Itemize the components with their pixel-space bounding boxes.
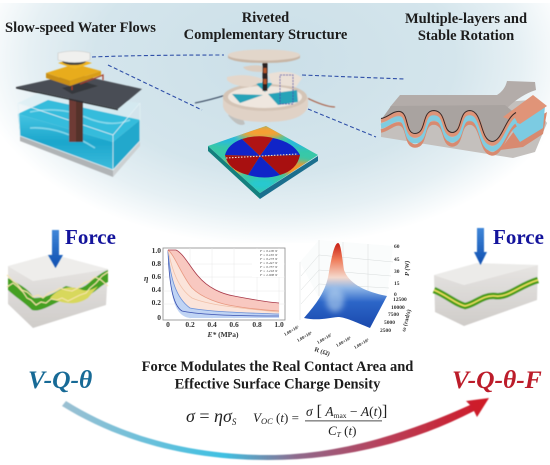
chart: 3D power surface: R (Ω) <box>313 346 331 358</box>
illustration: multilayer wave structure <box>381 81 547 158</box>
chart: 3D power surface: P (W) <box>404 261 411 276</box>
omega axis labels: 2500 <box>380 328 391 334</box>
y axis labels: 0.4 <box>152 285 161 294</box>
z axis labels: 15 <box>394 281 400 287</box>
z axis labels: 45 <box>394 257 400 263</box>
resistance axis labels: 1.00×10⁵ <box>283 324 300 337</box>
resistance axis labels: 1.00×10⁹ <box>353 337 370 350</box>
x axis labels: 0.4 <box>207 320 217 329</box>
chart: 3D power surface: ω (rad/s) <box>400 309 413 333</box>
equation: open-circuit voltage: V <box>253 410 261 425</box>
x axis labels: 0.6 <box>229 320 239 329</box>
heading: slow-speed water flows: Slow-speed Water Flows <box>5 20 156 36</box>
z axis labels <box>394 244 400 298</box>
x axis labels: 0.8 <box>252 320 262 329</box>
equation: open-circuit voltage: max <box>334 411 347 420</box>
equation: open-circuit voltage: OC <box>261 416 273 426</box>
resistance axis labels: 1.00×10⁶ <box>296 330 313 343</box>
omega axis labels: 5000 <box>384 320 395 326</box>
illustration: rough contact block <box>7 254 108 328</box>
resistance axis labels <box>283 324 370 350</box>
omega axis labels: 7500 <box>388 312 399 318</box>
illustration: riveted rotor exploded view <box>195 50 335 125</box>
label: V-Q-theta-F: V-Q-θ-F <box>452 365 542 394</box>
z axis labels: 0 <box>394 292 397 298</box>
heading: multiple layers and stable rotation: Multiple-layers and <box>405 11 527 27</box>
y axis labels: 0.2 <box>152 298 161 307</box>
heading: riveted complementary structure: Riveted <box>242 10 289 26</box>
equation: open-circuit voltage: ( <box>273 410 280 425</box>
y axis labels <box>152 246 161 322</box>
arrow: V-Q-theta to V-Q-theta-F <box>62 398 489 460</box>
illustration: water tank test rig <box>16 51 142 177</box>
label: V-Q-theta: V-Q-θ <box>28 365 92 394</box>
equation: open-circuit voltage: σ [ A <box>306 403 334 420</box>
illustration: smooth contact block <box>434 263 538 326</box>
label: force left: Force <box>65 225 116 249</box>
equation: open-circuit voltage: C <box>328 423 337 438</box>
icon: force arrow right <box>474 228 487 265</box>
equation: open-circuit voltage: T <box>337 430 342 439</box>
y axis labels: 0 <box>157 313 161 322</box>
omega axis labels: 10000 <box>391 305 405 311</box>
equation: sigma: S <box>232 417 237 427</box>
z axis labels: 60 <box>394 244 400 250</box>
equation: open-circuit voltage: − <box>347 404 361 419</box>
chart legend: F = 0.100 N <box>259 249 278 253</box>
x axis labels: 0.2 <box>185 320 195 329</box>
x axis labels <box>166 320 284 329</box>
equation: open-circuit voltage: A(t)] <box>361 403 387 420</box>
y axis labels: 0.8 <box>152 259 161 268</box>
chart legend: F = 0.273 N <box>259 257 278 261</box>
dashed connector lines <box>92 55 405 137</box>
chart legend: F = 0.447 N <box>259 261 278 265</box>
y axis labels: 1.0 <box>152 246 161 255</box>
chart: eta versus modulus line chart: η <box>144 274 149 283</box>
chart: 3D power surface <box>283 240 413 358</box>
equation: sigma: σ = ησ <box>186 406 232 426</box>
heading: riveted complementary structure: Complementary Structure <box>184 27 348 43</box>
chart: eta versus modulus line chart <box>144 246 285 339</box>
heading: multiple layers and stable rotation: Stable Rotation <box>418 28 514 44</box>
omega axis labels: 12500 <box>393 297 407 303</box>
axis titles: E* (MPa) <box>206 330 239 339</box>
y axis labels: 0.6 <box>152 272 161 281</box>
heading: force modulates contact area: Effective Surface Charge Density <box>175 376 381 392</box>
resistance axis labels: 1.00×10⁸ <box>335 335 352 348</box>
equation: open-circuit voltage: t) <box>348 423 356 438</box>
label: force right: Force <box>493 225 544 249</box>
resistance axis labels: 1.00×10⁷ <box>316 332 333 345</box>
chart legend: F = 2.008 N <box>259 273 278 277</box>
chart legend: F = 1.218 N <box>259 269 278 273</box>
illustration: simulated potential heat map <box>208 125 318 199</box>
chart legend: F = 0.737 N <box>259 265 278 269</box>
z axis labels: 30 <box>394 269 400 275</box>
x axis labels: 0 <box>166 320 170 329</box>
chart legend <box>252 249 284 277</box>
heading: force modulates contact area: Force Modulates the Real Contact Area and <box>142 359 413 375</box>
omega axis labels <box>380 297 407 334</box>
icon: force arrow left <box>48 230 63 268</box>
x axis labels: 1.0 <box>274 320 284 329</box>
equation: open-circuit voltage <box>253 403 387 439</box>
chart legend: F = 0.165 N <box>259 253 278 257</box>
equation: open-circuit voltage: ( <box>341 423 348 438</box>
equation: open-circuit voltage: t) = <box>280 410 299 425</box>
